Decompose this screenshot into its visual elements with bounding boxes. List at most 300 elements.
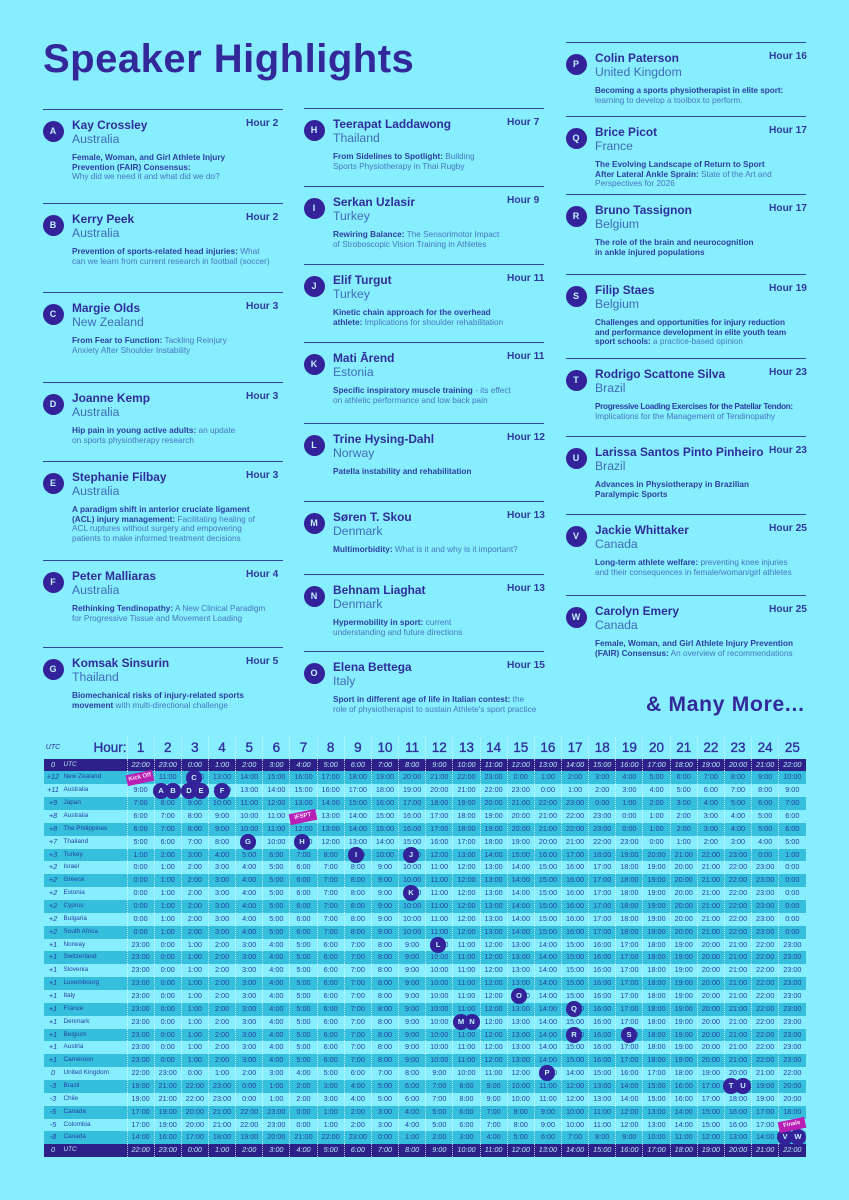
- row: Slovenia: 5:00: [296, 965, 311, 974]
- row: Cyprus: 18:00: [620, 901, 639, 910]
- row: Australia +8: 11:00: [268, 811, 285, 820]
- row: Australia +11: 3:00: [622, 785, 636, 794]
- row: Luxembourg: 18:00: [647, 978, 666, 987]
- marker T: [723, 1078, 739, 1094]
- row: Thailand: 12:00: [322, 837, 340, 846]
- row: New Zealand: 19:00: [376, 772, 394, 781]
- row: UTC bottom: 1:00: [215, 1145, 229, 1154]
- speaker J: [304, 264, 544, 342]
- marker P: [539, 1065, 555, 1081]
- row: The Philippines: [44, 823, 806, 836]
- row: Japan: 20:00: [484, 798, 503, 807]
- country: Australia: [72, 583, 119, 597]
- marker F: F: [220, 786, 224, 795]
- row: Colombia: 18:00: [783, 1120, 801, 1129]
- row: Australia +11: 6:00: [704, 785, 718, 794]
- row: France: 2:00: [215, 1004, 229, 1013]
- row: Japan: 4:00: [704, 798, 718, 807]
- row: Italy: 0:00: [161, 991, 175, 1000]
- row: Thailand: 22:00: [593, 837, 611, 846]
- row: Estonia: 18:00: [620, 888, 639, 897]
- row: Japan: 18:00: [430, 798, 448, 807]
- marker G: G: [245, 837, 251, 846]
- row: Thailand: 20:00: [539, 837, 557, 846]
- marker S: S: [626, 1030, 632, 1039]
- badge G: G: [49, 664, 56, 674]
- row: South Africa: 0:00: [133, 927, 148, 936]
- row: South Africa: 4:00: [242, 927, 256, 936]
- marker G: [240, 834, 256, 850]
- row: Israel: 1:00: [161, 862, 175, 871]
- row: Australia +11: 9:00: [785, 785, 799, 794]
- row: Austria: 0:00: [161, 1042, 175, 1051]
- row: Colombia: 23:00: [267, 1120, 285, 1129]
- row: South Africa: 9:00: [378, 927, 392, 936]
- row: United Kingdom: 13:00: [539, 1068, 557, 1077]
- row: Switzerland: [44, 951, 806, 964]
- row: Thailand: 6:00: [161, 837, 175, 846]
- row: Brazil: 2:00: [296, 1081, 311, 1090]
- row: Colombia: 2:00: [351, 1120, 365, 1129]
- talk description: Prevention (FAIR) Consensus:: [72, 163, 191, 172]
- row: Canada -5: 23:00: [267, 1107, 285, 1116]
- row: Japan: 23:00: [566, 798, 584, 807]
- row: Luxembourg: 7:00: [351, 978, 365, 987]
- name: Filip Staes: [595, 283, 654, 297]
- row: Luxembourg: Luxembourg: [64, 979, 99, 986]
- row: Austria: 1:00: [188, 1042, 202, 1051]
- row: Slovenia: 8:00: [378, 965, 392, 974]
- row: Australia +11: 2:00: [595, 785, 609, 794]
- row: Turkey: 19:00: [620, 850, 639, 859]
- name: Komsak Sinsurin: [72, 656, 169, 670]
- row: The Philippines: 18:00: [457, 824, 476, 833]
- row: Denmark: 8:00: [378, 1017, 392, 1026]
- tag: IFSPT: IFSPT: [294, 812, 312, 821]
- row: Switzerland: Switzerland: [64, 953, 97, 960]
- marker U: U: [740, 1081, 746, 1090]
- row: Bulgaria: 15:00: [539, 914, 557, 923]
- row: Israel: 7:00: [324, 862, 338, 871]
- row: Denmark: 19:00: [675, 1017, 693, 1026]
- row: Israel: 12:00: [457, 862, 476, 871]
- row: Australia +8: 20:00: [512, 811, 530, 820]
- row: Luxembourg: +1: [49, 978, 57, 987]
- row: UTC bottom: 10:00: [457, 1145, 476, 1154]
- row: Canada -8: 16:00: [159, 1132, 177, 1141]
- hour: Hour 7: [507, 117, 539, 128]
- row: Italy: 11:00: [458, 991, 475, 1000]
- row: France: 11:00: [458, 1004, 475, 1013]
- row: Denmark: 0:00: [161, 1017, 175, 1026]
- row: Bulgaria: 9:00: [378, 914, 392, 923]
- row: Japan: 10:00: [213, 798, 231, 807]
- row: Chile: 16:00: [675, 1094, 693, 1103]
- talk description: [595, 402, 793, 421]
- row: Switzerland: 18:00: [647, 952, 666, 961]
- row: United Kingdom: 19:00: [702, 1068, 720, 1077]
- row: UTC top: 0:00: [188, 760, 202, 768]
- row: Estonia: 9:00: [378, 888, 392, 897]
- name: Kerry Peek: [72, 212, 134, 226]
- row: Cyprus: 7:00: [324, 901, 338, 910]
- row: Turkey: 23:00: [729, 850, 747, 859]
- row: Cyprus: 22:00: [729, 901, 747, 910]
- row: Bulgaria: 17:00: [593, 914, 611, 923]
- row: Norway: 22:00: [756, 940, 774, 949]
- row: South Africa: South Africa: [64, 928, 98, 935]
- row: Japan: +9: [49, 798, 57, 807]
- row: Austria: 17:00: [620, 1042, 639, 1051]
- row: Japan: 1:00: [622, 798, 636, 807]
- row: Denmark: 20:00: [702, 1017, 720, 1026]
- row: United Kingdom: 5:00: [324, 1068, 338, 1077]
- row: Australia +11: 10:00: [159, 785, 177, 794]
- row: UTC bottom: 16:00: [620, 1145, 639, 1154]
- row: UTC bottom: 23:00: [159, 1145, 177, 1154]
- row: Cameroon: 2:00: [215, 1055, 229, 1064]
- name: Teerapat Laddawong: [333, 117, 451, 131]
- row: France: 14:00: [539, 1004, 557, 1013]
- row: Belgium: 11:00: [458, 1030, 475, 1039]
- row: Luxembourg: 20:00: [702, 978, 720, 987]
- row: South Africa: 5:00: [269, 927, 283, 936]
- row: France: 20:00: [702, 1004, 720, 1013]
- row: Switzerland: 4:00: [269, 952, 283, 961]
- row: New Zealand: 9:00: [758, 772, 772, 781]
- row: Switzerland: 14:00: [539, 952, 557, 961]
- row: Japan: 13:00: [294, 798, 313, 807]
- row: Turkey: +3: [49, 850, 57, 859]
- speaker P: [566, 42, 806, 116]
- row: The Philippines: 4:00: [731, 824, 745, 833]
- row: Canada -5: 14:00: [675, 1107, 693, 1116]
- marker N: [464, 1014, 480, 1030]
- badge D: [42, 394, 64, 414]
- row: UTC bottom: 21:00: [756, 1145, 774, 1154]
- hour: Hour 25: [769, 604, 807, 615]
- row: Norway: 23:00: [783, 940, 801, 949]
- row: UTC top: 13:00: [539, 760, 557, 768]
- speaker T: [566, 358, 806, 436]
- row: New Zealand: 0:00: [514, 772, 528, 781]
- marker W: W: [794, 1132, 802, 1141]
- talk description: [333, 386, 511, 405]
- talk description: for Progressive Tissue and Movement Loading: [72, 614, 242, 623]
- row: Luxembourg: 11:00: [458, 978, 475, 987]
- row: The Philippines: 15:00: [376, 824, 394, 833]
- hour header row: 4: [218, 740, 226, 755]
- talk description: Why did we need it and what did we do?: [72, 172, 220, 181]
- row: Australia +8: 6:00: [785, 811, 799, 820]
- row: South Africa: 12:00: [457, 927, 476, 936]
- row: Australia +8: 7:00: [161, 811, 175, 820]
- row: UTC bottom: 13:00: [539, 1145, 557, 1154]
- row: UTC top: 15:00: [593, 760, 611, 768]
- row: Japan: 17:00: [403, 798, 421, 807]
- row: Italy: Italy: [64, 992, 75, 999]
- row: Slovenia: 17:00: [620, 965, 639, 974]
- row: United Kingdom: 23:00: [159, 1068, 177, 1077]
- hour: Hour 11: [507, 351, 544, 362]
- row: Greece: Greece: [64, 876, 84, 883]
- tag: Finale: Finale: [783, 1120, 801, 1129]
- row: Australia +11: 8:00: [758, 785, 772, 794]
- row: New Zealand: 14:00: [240, 772, 258, 781]
- row: UTC top: 16:00: [620, 760, 639, 768]
- row: South Africa: 10:00: [403, 927, 421, 936]
- marker Q: [566, 1001, 582, 1017]
- row: Greece: 4:00: [242, 875, 256, 884]
- talk description: on sports physiotherapy research: [72, 436, 194, 445]
- row: Colombia: 16:00: [729, 1120, 747, 1129]
- talk description: Sport in different age of life in Italian contest: the: [333, 695, 524, 704]
- talk description: [595, 639, 793, 658]
- row: Canada -8: 14:00: [131, 1132, 150, 1141]
- row: Thailand: 1:00: [677, 837, 691, 846]
- marker C: C: [191, 773, 197, 782]
- row: Denmark: 5:00: [296, 1017, 311, 1026]
- talk description: Specific inspiratory muscle training - its effect: [333, 386, 511, 395]
- row: Canada -8: 2:00: [432, 1132, 446, 1141]
- row: Australia +8: 14:00: [349, 811, 367, 820]
- row: Norway: 15:00: [566, 940, 584, 949]
- row: Cameroon: 23:00: [131, 1055, 150, 1064]
- talk description: From Fear to Function: Tackling Reinjury: [72, 336, 227, 345]
- row: Belgium: 5:00: [296, 1030, 311, 1039]
- badge T: [566, 370, 586, 390]
- row: Denmark: 18:00: [647, 1017, 666, 1026]
- row: UTC top: 14:00: [566, 760, 584, 768]
- row: Colombia: 17:00: [131, 1120, 150, 1129]
- row: Estonia: +2: [49, 888, 57, 897]
- row: Switzerland: 20:00: [702, 952, 720, 961]
- row: Turkey: 16:00: [539, 850, 557, 859]
- row: UTC top: 4:00: [296, 760, 311, 768]
- hour: Hour 5: [246, 656, 278, 667]
- row: Japan: 7:00: [785, 798, 799, 807]
- row: Thailand: 18:00: [484, 837, 503, 846]
- row: New Zealand: 17:00: [322, 772, 340, 781]
- row: Colombia: 13:00: [647, 1120, 666, 1129]
- row: Turkey: 8:00: [324, 850, 338, 859]
- row: Austria: 19:00: [675, 1042, 693, 1051]
- talk description: on athletic performance and low back pain: [333, 396, 488, 405]
- talk description: ACL ruptures without surgery and empowering: [72, 524, 242, 533]
- row: UTC top: 22:00: [783, 760, 801, 768]
- marker O: O: [516, 991, 522, 1000]
- row: Japan: 2:00: [649, 798, 664, 807]
- row: UTC top: 11:00: [485, 760, 502, 768]
- speaker C: [43, 292, 283, 382]
- row: Italy: 14:00: [539, 991, 557, 1000]
- row: Cyprus: 10:00: [403, 901, 421, 910]
- row: Greece: 11:00: [430, 875, 448, 884]
- row: Bulgaria: 0:00: [785, 914, 799, 923]
- hour: Hour 16: [769, 51, 807, 62]
- row: Austria: 6:00: [324, 1042, 338, 1051]
- row: Chile: 2:00: [296, 1094, 311, 1103]
- row: Cyprus: 16:00: [566, 901, 584, 910]
- row: Estonia: 0:00: [133, 888, 148, 897]
- hour header row: 15: [513, 740, 528, 755]
- row: Turkey: 15:00: [512, 850, 530, 859]
- row: Thailand: +7: [49, 837, 57, 846]
- row: Cyprus: 0:00: [133, 901, 148, 910]
- row: Slovenia: 6:00: [324, 965, 338, 974]
- row: Israel: +2: [49, 862, 57, 871]
- row: Luxembourg: 17:00: [620, 978, 639, 987]
- row: South Africa: 0:00: [785, 927, 799, 936]
- talk description: learning to develop a toolbox to perform.: [595, 96, 743, 105]
- row: Greece: 10:00: [403, 875, 421, 884]
- row: Turkey: 12:00: [430, 850, 448, 859]
- row: United Kingdom: 9:00: [432, 1068, 446, 1077]
- row: Turkey: 4:00: [215, 850, 229, 859]
- row: Colombia: 14:00: [675, 1120, 693, 1129]
- marker T: T: [729, 1081, 733, 1090]
- row: Japan: 16:00: [376, 798, 394, 807]
- row: Bulgaria: 4:00: [242, 914, 256, 923]
- hour header row: 1: [137, 740, 144, 755]
- row: Turkey: 0:00: [758, 850, 772, 859]
- row: Norway: 19:00: [675, 940, 693, 949]
- talk description: A paradigm shift in anterior cruciate ligament: [72, 505, 250, 514]
- row: Australia +8: 6:00: [133, 811, 148, 820]
- talk description: (FAIR) Consensus: An overview of recommendations: [595, 649, 793, 658]
- hour: Hour 4: [246, 569, 278, 580]
- row: New Zealand: 12:00: [186, 772, 204, 781]
- row: Cameroon: 13:00: [512, 1055, 530, 1064]
- speaker W: [566, 595, 806, 665]
- row: Greece: 15:00: [539, 875, 557, 884]
- row: United Kingdom: 12:00: [512, 1068, 530, 1077]
- schedule table: [44, 737, 806, 1157]
- row: Greece: 5:00: [269, 875, 283, 884]
- row: Colombia: 4:00: [405, 1120, 419, 1129]
- row: Bulgaria: 0:00: [133, 914, 148, 923]
- row: United Kingdom: 2:00: [242, 1068, 256, 1077]
- row: France: 13:00: [512, 1004, 530, 1013]
- row: Israel: 11:00: [430, 862, 448, 871]
- hour header row: 14: [486, 740, 501, 755]
- row: Denmark: 12:00: [484, 1017, 503, 1026]
- row: Estonia: 8:00: [351, 888, 365, 897]
- row: New Zealand: +12: [47, 772, 59, 781]
- row: Canada -8: 21:00: [294, 1132, 313, 1141]
- row: Slovenia: 1:00: [188, 965, 202, 974]
- row: United Kingdom: 22:00: [131, 1068, 150, 1077]
- row: Luxembourg: 3:00: [242, 978, 256, 987]
- row: Luxembourg: 12:00: [484, 978, 503, 987]
- row: Bulgaria: 21:00: [702, 914, 720, 923]
- row: South Africa: 3:00: [215, 927, 229, 936]
- row: Cameroon: 0:00: [161, 1055, 175, 1064]
- row: The Philippines: 7:00: [161, 824, 175, 833]
- row: Israel: 21:00: [702, 862, 720, 871]
- row: Austria: 3:00: [242, 1042, 256, 1051]
- row: The Philippines: 10:00: [240, 824, 258, 833]
- row: Slovenia: 10:00: [430, 965, 448, 974]
- row: Italy: 9:00: [405, 991, 419, 1000]
- row: Italy: 4:00: [269, 991, 283, 1000]
- talk description: Kinetic chain approach for the overhead: [333, 308, 491, 317]
- row: New Zealand: [44, 771, 806, 784]
- row: France: +1: [49, 1004, 57, 1013]
- row: UTC bottom: UTC: [64, 1146, 77, 1153]
- row: Chile: 5:00: [378, 1094, 392, 1103]
- row: Cameroon: 4:00: [269, 1055, 283, 1064]
- row: UTC bottom: 11:00: [485, 1145, 502, 1154]
- talk description: Female, Woman, and Girl Athlete Injury: [72, 153, 225, 162]
- row: UTC bottom: 7:00: [378, 1145, 392, 1154]
- row: Austria: 22:00: [756, 1042, 774, 1051]
- title: Speaker Highlights: [43, 37, 414, 81]
- hour header row: 13: [459, 740, 474, 755]
- row: Belgium: 3:00: [242, 1030, 256, 1039]
- row: Greece: 0:00: [785, 875, 799, 884]
- row: Canada -5: 13:00: [647, 1107, 666, 1116]
- speaker S: [566, 274, 806, 358]
- row: Luxembourg: 2:00: [215, 978, 229, 987]
- hour: Hour 13: [507, 510, 545, 521]
- row: Denmark: 1:00: [188, 1017, 202, 1026]
- country: Belgium: [595, 297, 639, 311]
- row: Belgium: 18:00: [647, 1030, 666, 1039]
- row: United Kingdom: 17:00: [647, 1068, 666, 1077]
- row: France: 16:00: [593, 1004, 611, 1013]
- name: Søren T. Skou: [333, 510, 412, 524]
- row: Brazil: [44, 1080, 806, 1093]
- row: UTC bottom: 5:00: [324, 1145, 338, 1154]
- row: Brazil: 20:00: [783, 1081, 801, 1090]
- row: Luxembourg: 16:00: [593, 978, 611, 987]
- row: The Philippines: 19:00: [484, 824, 503, 833]
- row: Cameroon: 11:00: [458, 1055, 475, 1064]
- row: Australia +11: 12:00: [213, 785, 231, 794]
- row: Italy: 3:00: [242, 991, 256, 1000]
- row: Chile: 10:00: [512, 1094, 530, 1103]
- row: UTC top: 17:00: [647, 760, 666, 768]
- badge N: N: [311, 590, 317, 600]
- row: Australia +11: 5:00: [677, 785, 691, 794]
- row: Chile: 19:00: [756, 1094, 774, 1103]
- talk description: Anxiety After Shoulder Instability: [72, 346, 190, 355]
- marker S: [621, 1027, 637, 1043]
- speaker K: [304, 342, 544, 423]
- row: United Kingdom: 4:00: [296, 1068, 311, 1077]
- row: Cameroon: 19:00: [675, 1055, 693, 1064]
- row: Austria: 16:00: [593, 1042, 611, 1051]
- badge I: [304, 198, 324, 218]
- row: Estonia: 20:00: [675, 888, 693, 897]
- marker H: [294, 834, 310, 850]
- row: Belgium: 0:00: [161, 1030, 175, 1039]
- row: Cyprus: 1:00: [161, 901, 175, 910]
- row: Belgium: 23:00: [783, 1030, 801, 1039]
- row: Australia +11: 21:00: [457, 785, 476, 794]
- row: Canada -5: 7:00: [486, 1107, 501, 1116]
- row: Cyprus: 9:00: [378, 901, 392, 910]
- row: Japan: 14:00: [322, 798, 340, 807]
- row: Austria: [49, 1041, 802, 1054]
- row: Norway: +1: [49, 940, 57, 949]
- hour header row: 10: [377, 740, 392, 755]
- row: Bulgaria: 11:00: [430, 914, 448, 923]
- badge T: T: [573, 374, 579, 384]
- row: Canada -8: 12:00: [702, 1132, 720, 1141]
- speaker Q: [566, 116, 806, 194]
